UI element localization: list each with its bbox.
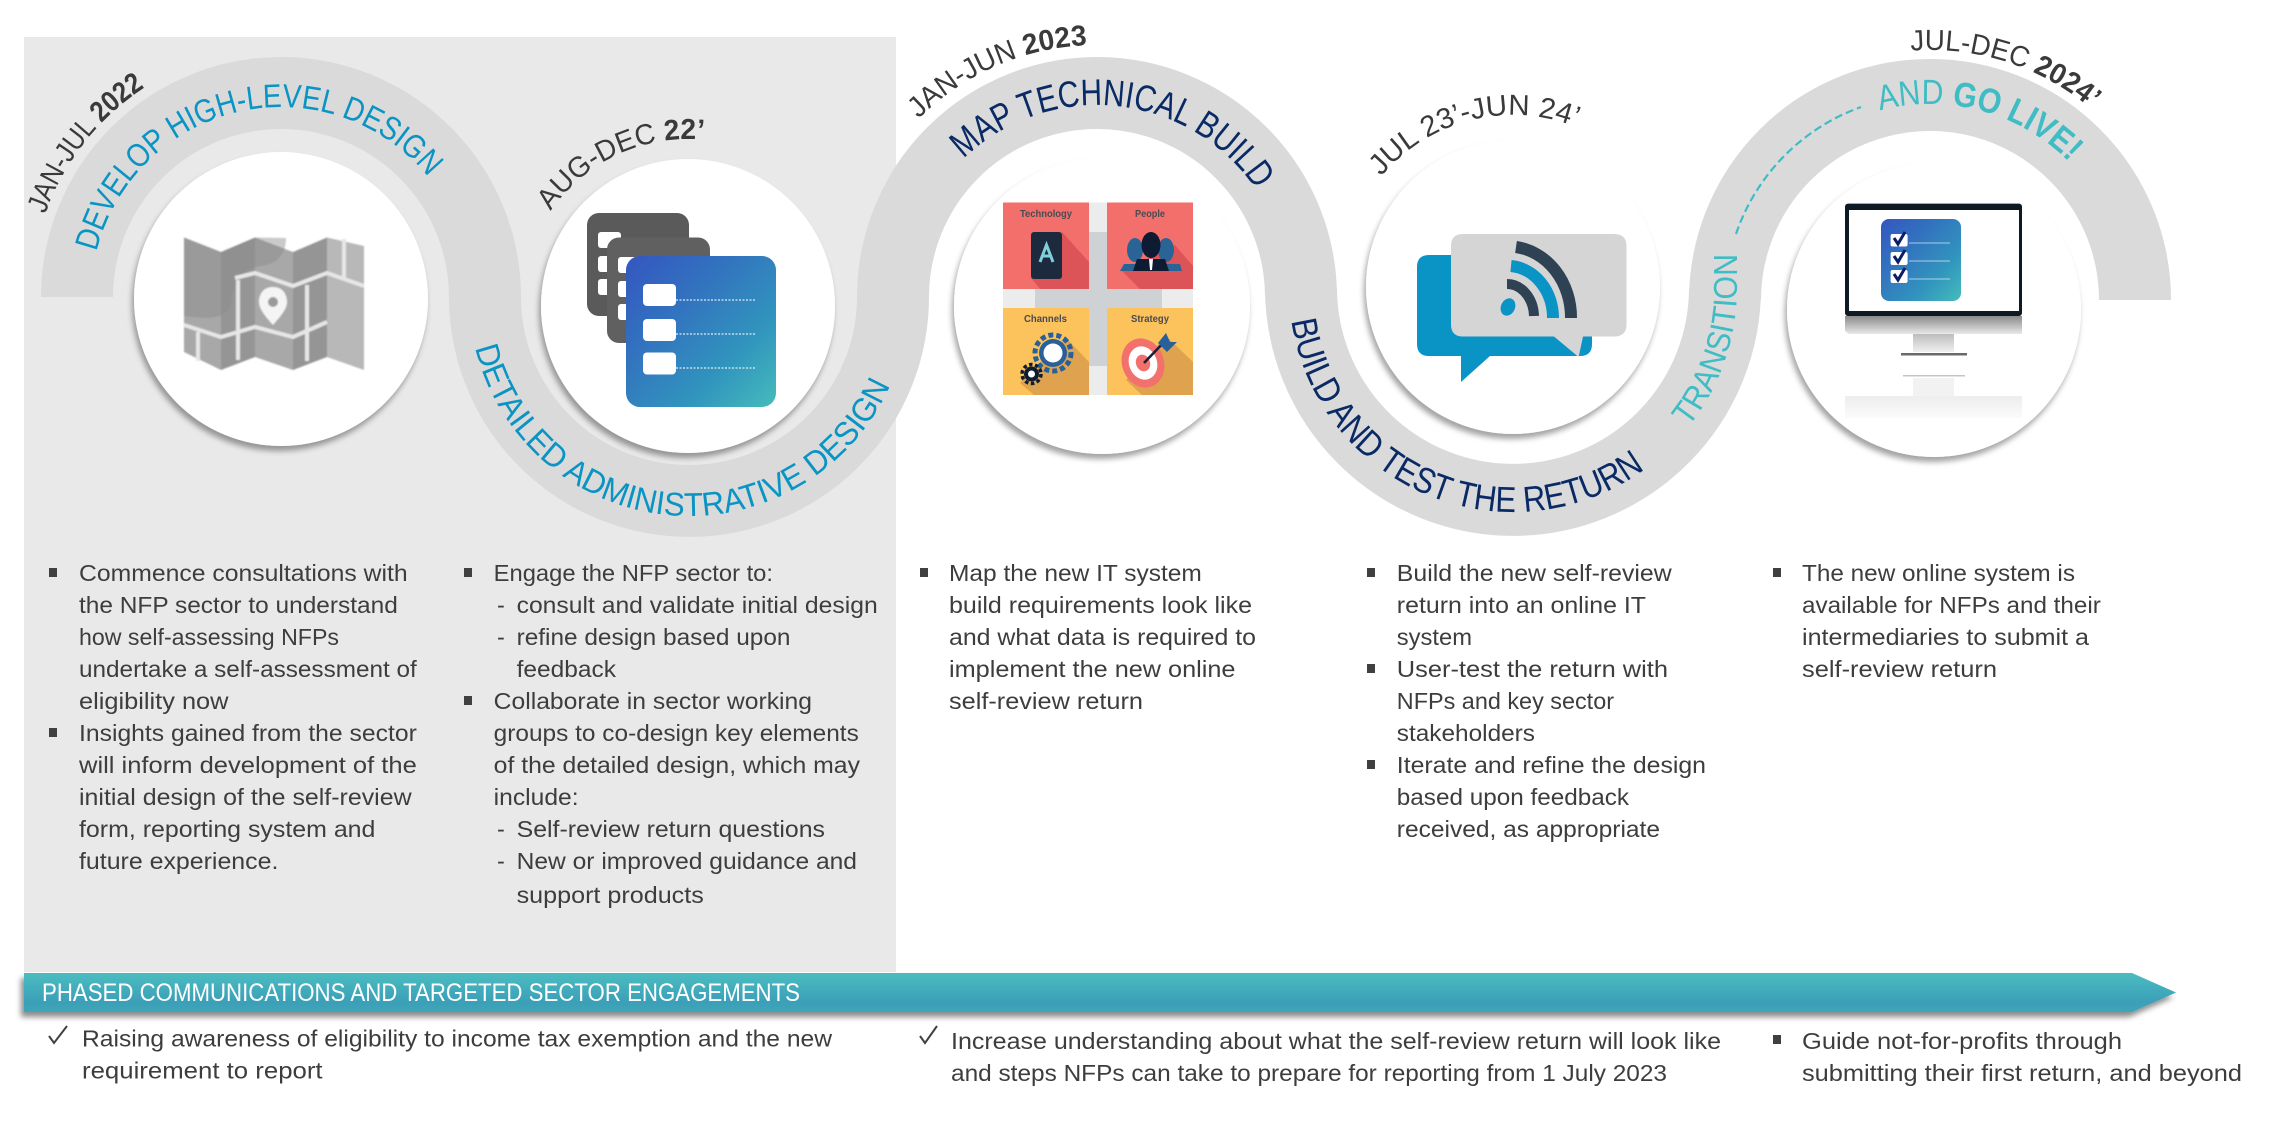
text block: phase 5 bullets: intermediaries to submit a — [1802, 624, 2090, 650]
text block: phase 2 bullets: - — [497, 816, 505, 842]
icon: stacked form cards — [587, 213, 776, 407]
text block: phase 1 bullets: undertake a self-assessment of — [79, 656, 417, 682]
tile label: Strategy: Strategy — [1131, 313, 1169, 325]
tile label: Channels: Channels — [1024, 313, 1067, 325]
text block: phase 5 bullets — [1773, 560, 2101, 682]
circle: phase 5 — [1787, 163, 2081, 457]
text block: phase 2 bullets: include: — [494, 784, 579, 810]
text block: phase 2 bullets: - — [497, 848, 505, 874]
text block: phase 3 bullets — [920, 560, 1256, 714]
text block: phase 1 bullets: future experience. — [79, 848, 278, 874]
text block: phase 4 bullets: based upon feedback — [1397, 784, 1629, 810]
banner text: PHASED COMMUNICATIONS AND TARGETED SECTOR ENGAGEMENTS — [42, 979, 800, 1007]
date: Jan-Jul 2022: JAN-JUL 2022 — [28, 73, 144, 212]
text block: phase 2 bullets: New or improved guidance and — [517, 848, 857, 874]
icon: desktop monitor with checklist — [1845, 204, 2022, 418]
text block: phase 3 bullets: implement the new online — [949, 656, 1236, 682]
circle: phase 3 — [954, 158, 1250, 454]
panel: completed phases background — [24, 37, 896, 972]
text block: phase 4 bullets: Iterate and refine the design — [1397, 752, 1706, 778]
ribbon heading: map technical build: MAP TECHNICAL BUILD — [948, 79, 1272, 184]
text block: phase 2 bullets: - — [497, 624, 505, 650]
text block: phase 5 bullets: The new online system is — [1802, 560, 2075, 586]
text block: phase 2 bullets: consult and validate initial design — [517, 592, 878, 618]
text block: phase 4 bullets — [1367, 560, 1706, 842]
text block: phase 1 bullets: eligibility now — [79, 688, 230, 714]
icon: chat bubbles with signal — [1417, 234, 1626, 382]
communications note 1: Raising awareness of eligibility to income tax exemption and the new — [82, 1026, 833, 1052]
text block: phase 4 bullets: NFPs and key sector — [1397, 688, 1614, 714]
icon: technology people channels strategy tiles — [1003, 202, 1193, 395]
text block: phase 1 bullets: initial design of the self-review — [79, 784, 413, 810]
text block: phase 2 bullets: - — [497, 592, 505, 618]
communications note 2 — [920, 1026, 1721, 1086]
date: Jul-Dec 2024: JUL-DEC 2024’ — [1911, 30, 2102, 102]
text block: phase 2 bullets — [464, 560, 878, 908]
text block: phase 4 bullets: system — [1397, 624, 1472, 650]
icon: folded map — [184, 238, 364, 370]
text block: phase 5 bullets: self-review return — [1802, 656, 1997, 682]
text block: phase 4 bullets: User-test the return with — [1397, 656, 1668, 682]
ribbon heading: detailed administrative design: DETAILED ADMINISTRATIVE DESIGN — [476, 344, 890, 516]
text block: phase 2 bullets: Engage the NFP sector to: — [494, 560, 773, 586]
text block: phase 2 bullets: Collaborate in sector working — [494, 688, 812, 714]
text block: phase 2 bullets: support products — [517, 882, 704, 908]
serpentine ribbon — [77, 93, 2135, 501]
ribbon heading: build and test the return: BUILD AND TEST THE RETURN — [1292, 318, 1643, 512]
tile label: Technology: Technology — [1020, 208, 1072, 220]
text block: phase 2 bullets: refine design based upon — [517, 624, 790, 650]
text block: phase 2 bullets: of the detailed design, which may — [494, 752, 860, 778]
communications note 3: Guide not-for-profits through — [1802, 1028, 2122, 1054]
text block: phase 3 bullets: and what data is required to — [949, 624, 1256, 650]
text block: phase 1 bullets: Commence consultations with — [79, 560, 408, 586]
communications note 3 — [1773, 1028, 2242, 1086]
communications note 3: submitting their first return, and beyond — [1802, 1060, 2242, 1086]
text block: phase 2 bullets: feedback — [517, 656, 616, 682]
communications note 1: requirement to report — [82, 1058, 323, 1084]
communications note 2: Increase understanding about what the self-review return will look like — [951, 1028, 1721, 1054]
text block: phase 4 bullets: Build the new self-review — [1397, 560, 1673, 586]
text block: phase 4 bullets: return into an online IT — [1397, 592, 1646, 618]
date: Jan-Jun 2023: JAN-JUN 2023 — [909, 25, 1086, 116]
text block: phase 1 bullets: form, reporting system and — [79, 816, 375, 842]
text block: phase 1 bullets — [49, 560, 417, 874]
text block: phase 2 bullets: groups to co-design key elements — [494, 720, 859, 746]
ribbon heading: and go live: AND GO LIVE! — [1880, 80, 2084, 160]
text block: phase 1 bullets: the NFP sector to understand — [79, 592, 398, 618]
dashed connector on ribbon — [1736, 107, 1861, 234]
text block: phase 1 bullets: will inform development of the — [78, 752, 417, 778]
tile label: People: People — [1135, 208, 1165, 220]
date: Aug-Dec 22: AUG-DEC 22’ — [540, 118, 704, 211]
date: Jul 23 to Jun 24: JUL 23’-JUN 24’ — [1370, 94, 1581, 174]
text block: phase 3 bullets: self-review return — [949, 688, 1143, 714]
arrow banner: phased communications — [24, 973, 2176, 1012]
circle: phase 4 — [1366, 140, 1660, 434]
communications note 1 — [49, 1026, 833, 1084]
text block: phase 3 bullets: build requirements look like — [949, 592, 1252, 618]
ribbon heading: develop high-level design: DEVELOP HIGH-LEVEL DESIGN — [75, 84, 444, 250]
circle: phase 1 — [134, 152, 428, 446]
circle: phase 2 — [541, 159, 835, 453]
text block: phase 1 bullets: how self-assessing NFPs — [79, 624, 339, 650]
text block: phase 4 bullets: stakeholders — [1397, 720, 1535, 746]
text block: phase 5 bullets: available for NFPs and their — [1802, 592, 2101, 618]
text block: phase 4 bullets: received, as appropriate — [1397, 816, 1660, 842]
ribbon heading: transition: TRANSITION — [1670, 256, 1738, 421]
communications note 2: and steps NFPs can take to prepare for reporting from 1 July 2023 — [951, 1060, 1667, 1086]
text block: phase 2 bullets: Self-review return questions — [517, 816, 825, 842]
text block: phase 1 bullets: Insights gained from the sector — [79, 720, 417, 746]
text block: phase 3 bullets: Map the new IT system — [949, 560, 1202, 586]
